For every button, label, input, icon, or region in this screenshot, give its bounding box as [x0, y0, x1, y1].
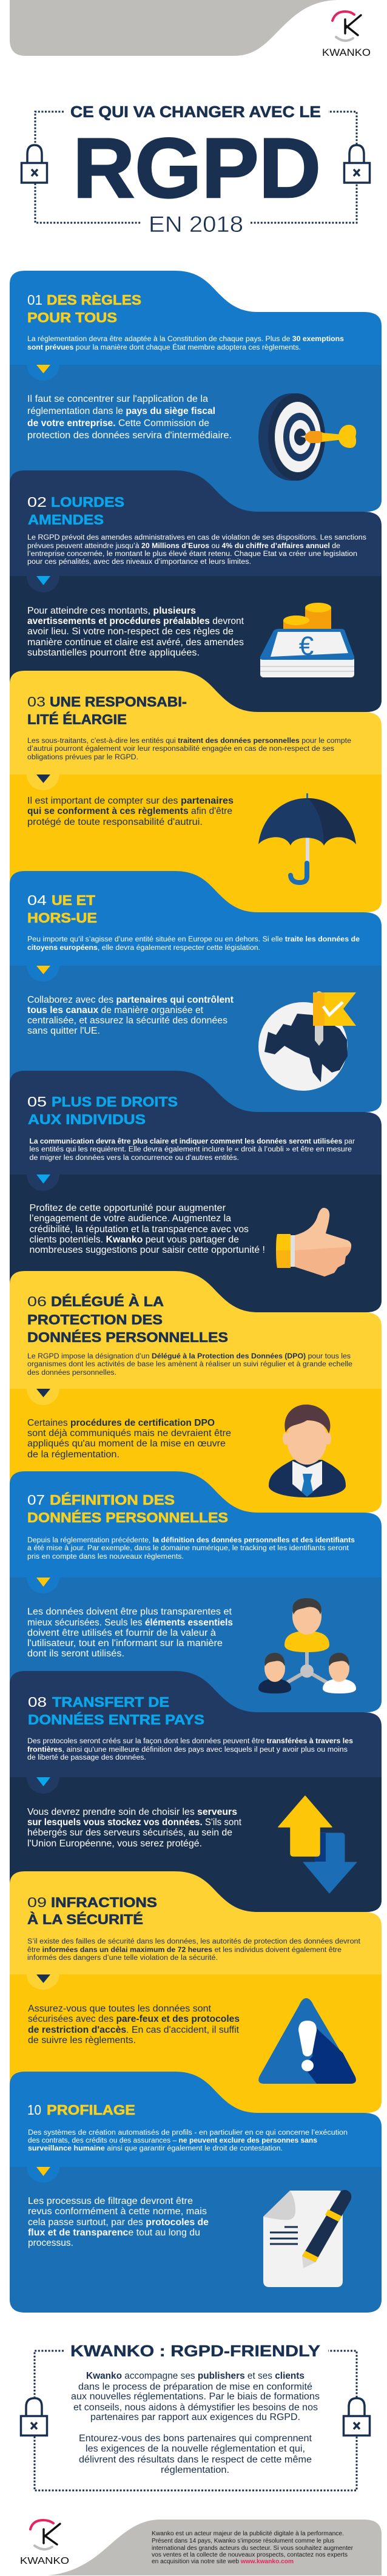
panel 10 body text: flux et de transparenc e tout au long du: [28, 2228, 200, 2238]
footer text: Kwanko est un acteur majeur de la publicité digitale à la performance.: [152, 2530, 344, 2537]
panel 10 description: surveillance humaine ainsi que garantir également le droit de contestation.: [28, 2145, 283, 2152]
panel 08 body text: [27, 1807, 242, 1849]
friendly paragraph 1: Kwanko accompagne ses publishers et ses clients: [86, 2371, 305, 2381]
logo: Kwanko: KWANKO: [322, 47, 371, 58]
panel 09 description: informés des dangers d’une telle violation de la sécurité.: [27, 1954, 218, 1962]
panel 03 body text: Il est important de compter sur des partenaires: [27, 796, 234, 806]
panel 08: transfert de données entre pays: [10, 1671, 382, 1912]
panel 07 body text: [27, 1607, 233, 1659]
panel 06 body text: de la réglementation.: [27, 1449, 119, 1460]
panel 08 lower background: [10, 1777, 382, 1912]
panel 02 description: l’entreprise concernée, le montant le plus élevé étant retenu. Chaque Etat va créer une legislation: [27, 551, 357, 558]
panel 03 body text: protégé de toute responsabilité d'autrui.: [27, 817, 203, 827]
icon: data protection officer: [269, 1405, 346, 1497]
panel 09 arrow tab: [27, 1974, 59, 1990]
footer text: Présent dans 14 pays, Kwanko s’impose résolument comme le plus: [152, 2538, 334, 2544]
icon: document and pen: [263, 2190, 351, 2287]
panel 02 body text: avoir lieu. Si votre non-respect de ces règles de: [27, 626, 234, 637]
panel 01 body text: [27, 394, 232, 441]
panel 03 upper background: [10, 671, 382, 912]
panel 02 description: prévues peuvent atteindre jusqu’à 20 Millions d’Euros ou 4% du chiffre d’affaires annuel de: [27, 543, 340, 550]
panel 07 body text: mieux sécurisées. Seuls les éléments essentiels: [27, 1618, 233, 1628]
panel 06 heading: [27, 1293, 228, 1345]
panel 05 heading: PLUS DE DROITS: [52, 1094, 178, 1110]
panel 08 arrow tab: [27, 1777, 59, 1794]
panel 05 description: les entités qui les requièrent. Elle devra également inclure le « droit à l’oubli » et être en mesure: [29, 1146, 352, 1153]
title frame: dotted lines: [35, 112, 357, 223]
panel 01 body text: de votre entreprise. Cette Commission de: [27, 418, 209, 429]
panel 05 upper background: [10, 1071, 382, 1312]
panel 02 body text: manière continue et claire est avéré, des amendes: [27, 637, 244, 648]
friendly paragraph 2: [79, 2433, 312, 2475]
panel 09 body text: [28, 2004, 240, 2046]
panel 01 lower background: [10, 365, 382, 512]
panel 09 description: S’il existe des failles de sécurité dans les données, les autorités de protection des données devront: [27, 1938, 361, 1945]
panel 10 heading: 10: [27, 2102, 41, 2118]
panel 03 lower background: [10, 774, 382, 912]
friendly paragraph 2: délivrent des résultats dans le respect de cette même: [79, 2455, 312, 2465]
panel 06 body text: [27, 1418, 231, 1460]
panel 05 heading: [27, 1094, 178, 1127]
panel 07 arrow tab: [27, 1578, 59, 1593]
panel 06 body text: Certaines procédures de certification DPO: [27, 1418, 215, 1428]
section: Kwanko RGPD-friendly: [21, 2342, 370, 2490]
footer logo: KWANKO: [20, 2556, 69, 2566]
panel 01 description: [27, 336, 344, 351]
friendly paragraph 1: aux nouvelles réglementations. Par le biais de formations: [71, 2391, 320, 2402]
panel 07 description: pris en compte dans les nouveaux règlements.: [27, 1553, 184, 1561]
panel 02 heading: 02: [27, 494, 47, 510]
panel 10 body text: processus.: [28, 2238, 73, 2248]
panel 06 body text: appliqués qu'au moment de la mise en œuvre: [27, 1439, 226, 1449]
panel 01 description: La réglementation devra être adaptée à la Constitution de chaque pays. Plus de 30 exemptions: [27, 336, 344, 343]
panel 01 body text: réglementation dans le pays du siège fiscal: [27, 406, 215, 416]
panel 06 lower background: [10, 1389, 382, 1513]
title line: en 2018: EN 2018: [149, 212, 243, 237]
footer text: en acquisition via notre site web www.kwanko.com: [152, 2558, 294, 2565]
friendly paragraph 1: dans le process de préparation de mise en conformité: [78, 2382, 312, 2392]
panel 03 description: d’autrui pourront également voir leur responsabilité engagée en cas de non-respect de ses: [27, 745, 334, 753]
panel 07 body text: l'utilisateur, tout en l'informant sur la manière: [27, 1638, 223, 1649]
panel 02: lourdes amendes: [10, 470, 382, 712]
panel 08 heading: DONNÉES ENTRE PAYS: [28, 1711, 204, 1727]
panel 04 body text: sans quitter l'UE.: [27, 1026, 100, 1036]
title block: [22, 103, 370, 237]
panel 05 body text: Profitez de cette opportunité pour augmenter: [29, 1203, 226, 1213]
panel 09 description: [27, 1938, 361, 1962]
panel 04 heading: 04: [27, 892, 47, 908]
panel 08 description: frontières , ainsi qu'une meilleure définition des pays avec lesquels il peut y avoir plus ou moins: [27, 1746, 348, 1754]
panel 08 heading: [28, 1694, 204, 1727]
icon: thumbs up: [276, 1208, 351, 1276]
panel 09 body text: Assurez-vous que toutes les données sont: [28, 2004, 212, 2014]
panel 07 body text: doivent être utilisés et fournir de la valeur à: [27, 1628, 216, 1638]
panel 10 body text: [28, 2196, 209, 2248]
panel 01 heading: DES RÈGLES: [47, 291, 141, 308]
footer text: vos ventes et la collecte de nouveaux prospects, contactez nos experts: [152, 2552, 348, 2558]
footer: [20, 2520, 382, 2575]
icon: warning triangle: [258, 1998, 356, 2084]
panel 02 heading: [27, 494, 124, 527]
panel 07 upper background: [10, 1471, 382, 1712]
panel 06 heading: DÉLÉGUÉ À LA: [51, 1293, 164, 1309]
panel 05: plus de droits aux individus: [10, 1071, 382, 1312]
panel 07 heading: DÉFINITION DES: [50, 1491, 175, 1508]
panel 04 description: [27, 936, 360, 952]
footer logo: [20, 2520, 69, 2566]
panel 05 heading: AUX INDIVIDUS: [28, 1111, 146, 1127]
panel 05 description: La communication devra être plus claire et indiquer comment les données seront utilisées par: [29, 1138, 355, 1145]
panel 09 lower background: [10, 1974, 382, 2113]
panel 07 body text: Les données doivent être plus transparentes et: [27, 1607, 232, 1617]
panel 08 upper background: [10, 1671, 382, 1912]
panel 01 description: sont prévues pour la manière dont chaque État membre adoptera ces règlements.: [27, 344, 301, 351]
friendly heading: KWANKO : RGPD-FRIENDLY: [70, 2342, 320, 2360]
panel 10 lower background: [10, 2167, 382, 2313]
panel 07 heading: DONNÉES PERSONNELLES: [27, 1509, 228, 1525]
panel 03 heading: [27, 694, 187, 727]
panel 01 heading: 01: [27, 292, 42, 308]
panel 05 heading: 05: [27, 1094, 47, 1110]
panel 09 body text: de suivre les règlements.: [28, 2035, 136, 2046]
panel 10 description: Des systèmes de création automatisés de profils - en particulier en ce qui concerne l’exécution: [28, 2129, 348, 2137]
panel 02 description: Le RGPD prévoit des amendes administratives en cas de violation de ses dispositions. Les sanctions: [27, 534, 366, 541]
panel 05 body text: crédibilité, la réputation et la transparence avec vos: [29, 1224, 249, 1235]
panel 04 body text: tous les canaux de manière organisée et: [27, 1005, 204, 1015]
footer text: [152, 2530, 354, 2565]
panel 10 body text: cela passe surtout, par des protocoles de: [28, 2217, 209, 2228]
icon: transfer arrows: [278, 1796, 357, 1893]
panel 07 description: Depuis la réglementation précédente, la définition des données personnelles et des identifiants: [27, 1537, 355, 1544]
panel 08 description: de liberté de passage des données.: [27, 1754, 146, 1761]
friendly frame: dotted lines: [35, 2351, 357, 2490]
friendly paragraph 1: partenaires par rapport aux exigences du RGPD.: [90, 2412, 300, 2422]
panel 07: définition des données personnelles: [10, 1471, 382, 1712]
panel 03 description: Les sous-traitants, c’est-à-dire les entités qui traitent des données personnelles pour le compte: [27, 737, 351, 745]
footer text: international des grands acteurs du secteur. Si vous souhaitez augmenter: [152, 2545, 354, 2552]
panel 07 lower background: [10, 1578, 382, 1712]
grey header shape: [10, 0, 340, 56]
panel 06 body text: sont déjà communiqués mais ne devraient être: [27, 1428, 231, 1439]
panel 06 heading: PROTECTION DES: [27, 1312, 163, 1327]
panel 02 body text: [27, 606, 244, 658]
icon: network of people: [258, 1598, 356, 1693]
panel 04: UE et hors-UE: [10, 871, 382, 1112]
panel 02 lower background: [10, 576, 382, 712]
panel 03: une responsabilité élargie: [10, 671, 382, 912]
panel 03 description: obligations prévues par le RGPD.: [27, 754, 138, 761]
icon: padlock left: [22, 145, 47, 183]
icon: globe with flag: [258, 991, 356, 1091]
friendly paragraph 1: et conseils, nous aidons à démystifier les besoins de nos: [73, 2402, 318, 2413]
friendly paragraph 2: Entourez-vous des bons partenaires qui comprennent: [79, 2433, 312, 2444]
panel 03 arrow tab: [27, 774, 59, 790]
panel 07 heading: 07: [27, 1492, 45, 1508]
panel 06 description: Le RGPD impose la désignation d’un Délégué à la Protection des Données (DPO) pour tous les: [27, 1353, 351, 1360]
panel 05 description: [29, 1138, 355, 1162]
panel 09 upper background: [10, 1871, 382, 2113]
panel 10 upper background: [10, 2072, 382, 2313]
panel 01 arrow tab: [27, 365, 59, 381]
panel 10 heading: PROFILAGE: [47, 2102, 135, 2118]
panel 01 heading: [27, 291, 141, 325]
panel 06 description: des données personnelles.: [27, 1369, 116, 1377]
icon: umbrella: [258, 793, 356, 883]
panel 04 body text: centralisée, et assurez la sécurité des données: [27, 1015, 227, 1026]
panel 07 description: [27, 1537, 355, 1561]
panel 02 arrow tab: [27, 576, 59, 592]
panel 03 body text: qui se conforment à ces règlements afin d'être: [27, 806, 232, 816]
panel 02 body text: substantielles pourront être appliquées.: [27, 648, 200, 658]
panel 09 heading: 09: [27, 1894, 47, 1910]
panel 03 heading: 03: [27, 694, 45, 710]
icon: euro banknotes and coins: [260, 603, 354, 677]
panel 10 description: des contrats, des crédits ou des assurances – ne peuvent exclure des personnes sans: [28, 2137, 317, 2144]
panel 03 heading: UNE RESPONSABI-: [50, 694, 187, 710]
header band with logo: [10, 0, 371, 58]
panel 06 upper background: [10, 1271, 382, 1513]
panel 04 body text: [27, 995, 234, 1036]
icon: padlock right: [345, 145, 370, 183]
panel 10 body text: revus conformément à cette norme, mais: [28, 2206, 207, 2217]
panel 07 heading: [27, 1491, 228, 1525]
panel 01 body text: protection des données servira d'intermédiaire.: [27, 430, 232, 441]
panel 06 heading: 06: [27, 1293, 47, 1309]
panel 01 upper background: [10, 271, 382, 512]
panel 07 description: a été mise à jour. Par exemple, dans le domaine numérique, le tracking et les identifiants seront: [27, 1545, 349, 1552]
title: RGPD: RGPD: [73, 120, 321, 215]
panel 08 body text: sur lesquels vous stockez vos données. S'ils sont: [27, 1817, 242, 1828]
panel 03 body text: [27, 796, 234, 827]
friendly paragraph 2: réglementation.: [161, 2465, 229, 2475]
panel 09 body text: de restriction d'accès. En cas d'accident, il suffit: [28, 2025, 240, 2035]
panel 03 heading: LITÉ ÉLARGIE: [27, 711, 127, 727]
panel 04 heading: [27, 892, 97, 926]
panel 03 description: [27, 737, 351, 761]
panel 05 lower background: [10, 1174, 382, 1312]
panel 06 description: organismes dont les activités de base les amènent à réaliser un suivi régulier et à grande echelle: [27, 1361, 352, 1368]
panel 05 arrow tab: [27, 1174, 59, 1191]
panel 06 heading: DONNÉES PERSONNELLES: [27, 1329, 228, 1345]
icon: euro banknotes and coins: €: [299, 631, 314, 661]
panel 09 heading: INFRACTIONS: [51, 1894, 157, 1910]
panel 10 body text: Les processus de filtrage devront être: [28, 2196, 193, 2206]
panel 04 heading: UE ET: [52, 892, 95, 908]
footer grey shape: [47, 2520, 382, 2575]
panel 04 arrow tab: [27, 966, 59, 981]
panel 01: des règles pour tous: [10, 271, 382, 512]
panel 10: profilage: [10, 2072, 382, 2313]
panel 08 description: Des protocoles seront créés sur la façon dont les données peuvent être transférées à travers les: [27, 1738, 353, 1745]
panel 08 heading: 08: [28, 1694, 47, 1710]
panel 09 heading: [27, 1894, 157, 1927]
panel 02 heading: LOURDES: [51, 494, 124, 510]
icon: target and dart: [258, 393, 356, 481]
panel 05 description: de migrer les données vers la concurrence ou d’autres entités.: [29, 1154, 239, 1162]
panel 06: délégué à la protection des données personnelles: [10, 1271, 382, 1513]
panel 09 description: être informées dans un délai maximum de 72 heures et les individus doivent également être: [27, 1947, 342, 1954]
panel 08 body text: hébergés sur des serveurs sécurisés, au sein de: [27, 1828, 232, 1838]
panel 10 description: [28, 2129, 348, 2152]
panel 05 body text: [29, 1203, 265, 1255]
panel 09 body text: sécurisées avec des pare-feux et des protocoles: [28, 2014, 240, 2024]
panel 07 body text: dont ils seront utilisés.: [27, 1649, 124, 1659]
panel 09 heading: À LA SÉCURITÉ: [27, 1911, 143, 1927]
panel 02 heading: AMENDES: [28, 512, 104, 527]
panel 04 body text: Collaborez avec des partenaires qui contrôlent: [27, 995, 234, 1005]
panel 08 body text: l'Union Européenne, vous serez protégé.: [27, 1839, 202, 1849]
panel 05 body text: l’engagement de votre audience. Augmentez la: [29, 1213, 231, 1224]
panel 04 lower background: [10, 966, 382, 1112]
panel 04 heading: HORS-UE: [27, 910, 97, 926]
panel 08 body text: Vous devrez prendre soin de choisir les serveurs: [27, 1807, 237, 1817]
title line: ce qui va changer: CE QUI VA CHANGER AVEC LE: [70, 103, 321, 121]
panel 02 description: [27, 534, 366, 566]
icon: padlock right: [343, 2398, 370, 2435]
panel 01 heading: POUR TOUS: [27, 310, 117, 325]
logo: Kwanko: [322, 12, 371, 58]
panel 02 body text: Pour atteindre ces montants, plusieurs: [27, 606, 196, 616]
icon: padlock left: [21, 2398, 47, 2435]
panel 04 description: Peu importe qu’il s’agisse d’une entité située en Europe ou en dehors. Si elle traite les données de: [27, 936, 360, 943]
panel 04 upper background: [10, 871, 382, 1112]
panel 02 body text: avertissements et procédures préalables devront: [27, 616, 244, 626]
panel 10 arrow tab: [27, 2167, 59, 2183]
panel 01 body text: Il faut se concentrer sur l'application de la: [27, 394, 208, 404]
friendly paragraph 1: [71, 2371, 320, 2422]
panel 02 upper background: [10, 470, 382, 712]
panel 08 heading: TRANSFERT DE: [52, 1694, 169, 1710]
panel 02 description: pour ces pénalités, avec des niveaux d’importance et leurs limites.: [27, 558, 251, 566]
panel 04 description: citoyens européens , elle devra également respecter cette législation.: [27, 944, 260, 952]
panel 08 description: [27, 1738, 353, 1761]
friendly paragraph 2: les exigences de la nouvelle réglementation et qui,: [86, 2444, 305, 2454]
panel 05 body text: clients potentiels. Kwanko peut vous partager de: [29, 1235, 239, 1245]
panel 06 description: [27, 1353, 352, 1377]
panel 09: infractions à la sécurité: [10, 1871, 382, 2113]
panel 05 body text: nombreuses suggestions pour saisir cette opportunité !: [29, 1245, 265, 1255]
panel 06 arrow tab: [27, 1389, 59, 1405]
